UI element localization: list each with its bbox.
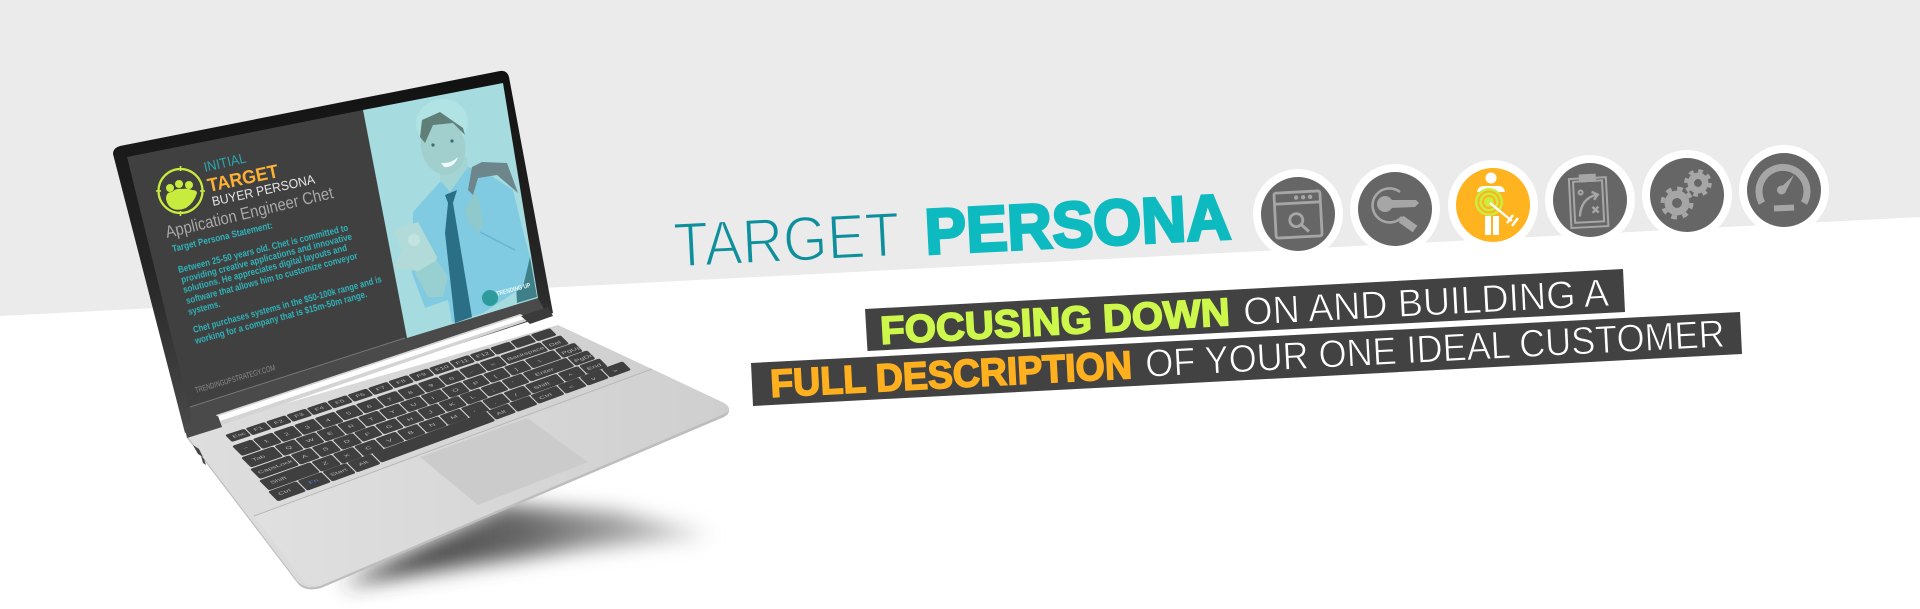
- key row: bottom row: [268, 361, 633, 502]
- key row: home row: H: [406, 417, 415, 422]
- trending up logo: TRENDING UP: [496, 282, 532, 298]
- key row: home row: ;: [490, 388, 496, 393]
- key row: numbers: 0: [448, 376, 456, 381]
- title: [672, 181, 1232, 281]
- key row: numbers: 6: [366, 404, 374, 409]
- blueprints: [393, 222, 437, 277]
- key row: home row: Enter: [534, 367, 556, 377]
- gray slanted background: [0, 0, 1920, 316]
- icon: speedometer: [1739, 145, 1829, 235]
- photo panel: [363, 83, 538, 338]
- raised hand: [465, 193, 483, 233]
- screen persona statement: systems.: [187, 299, 222, 318]
- key row: home row: K: [448, 402, 457, 407]
- subtitle line 1: [865, 269, 1625, 353]
- key row: shift row: ^: [568, 373, 576, 378]
- key row: QWERTY: I: [430, 396, 436, 401]
- key row: QWERTY: U: [409, 402, 419, 408]
- subtitle line 1: FOCUSING DOWN: [879, 291, 1231, 353]
- side ports: [193, 445, 206, 465]
- key row: shift row: End: [586, 363, 603, 371]
- man shirt: [412, 167, 530, 323]
- man neck: [440, 157, 468, 192]
- key row: QWERTY: Q: [284, 445, 294, 451]
- key row: shift row: ,: [471, 408, 477, 413]
- key row: home row: CapsLock: [257, 459, 295, 475]
- man shoulder jacket: [468, 162, 518, 195]
- key row: home row: PgDn: [573, 353, 596, 363]
- key row: numbers: 9: [427, 383, 436, 388]
- key row: function keys: F5: [334, 399, 347, 405]
- key row: numbers: 4: [324, 418, 333, 423]
- subtitle line 1: ON AND BUILDING A: [1242, 272, 1610, 334]
- key row: bottom row: v: [590, 376, 598, 381]
- key row: QWERTY: Tab: [251, 454, 267, 462]
- man face: [420, 123, 466, 174]
- icon: target persona figure: [1448, 160, 1538, 250]
- key row: bottom row: Start: [329, 468, 349, 477]
- key row: home row: A: [301, 454, 310, 459]
- key row: QWERTY: P: [472, 381, 481, 386]
- screen persona statement: solutions. He appreciates digital layouts and: [182, 243, 348, 296]
- key row: numbers: 2: [283, 432, 291, 437]
- right hinge: [521, 307, 553, 324]
- screen heading: Application Engineer Chet: [163, 183, 335, 242]
- key row: bottom row: Fn: [308, 478, 320, 485]
- key row: QWERTY: [241, 342, 586, 468]
- screen heading: [163, 150, 335, 242]
- screen bottom line: [190, 338, 405, 407]
- laptop illustration: [113, 71, 729, 589]
- key row: function keys: F3: [293, 412, 306, 419]
- icon: gears: [1642, 150, 1732, 240]
- key row: shift row: N: [428, 422, 437, 428]
- laptop lid: [113, 71, 553, 438]
- screen persona statement: [171, 220, 383, 347]
- screen persona statement: providing creative applications and innovative: [180, 231, 353, 286]
- screen persona statement: Chet purchases systems in the $50-100k range and is: [192, 274, 383, 336]
- key row: function keys: Esc: [231, 431, 248, 439]
- key row: bottom row: Ctrl: [277, 488, 293, 496]
- key row: numbers: 7: [386, 397, 394, 402]
- screen heading: TARGET: [206, 161, 281, 197]
- key row: QWERTY: R: [347, 424, 356, 429]
- subtitle: [751, 269, 1742, 406]
- key row: home row: G: [385, 424, 394, 430]
- key row: function keys: F2: [273, 419, 286, 426]
- key row: shift row: /: [513, 393, 519, 397]
- subtitle line 2: [751, 312, 1742, 406]
- key row: numbers: 8: [407, 390, 415, 395]
- key row: numbers: 5: [345, 411, 353, 416]
- key row: bottom row: Ctrl: [538, 392, 554, 401]
- screen persona statement: Between 25-50 years old. Chet is committed to: [177, 223, 350, 276]
- icon: keyword search: [1350, 164, 1440, 254]
- subtitle line 2: OF YOUR ONE IDEAL CUSTOMER: [1144, 313, 1726, 386]
- icon: browser search: [1253, 169, 1343, 259]
- key row: numbers: 3: [304, 425, 312, 430]
- key row: home row: D: [343, 439, 352, 445]
- screen persona statement: Target Persona Statement:: [171, 220, 274, 255]
- palm rest divider: [254, 369, 652, 516]
- key row: QWERTY: \: [537, 359, 543, 364]
- lower hand: [415, 260, 448, 297]
- screen footer url: TRENDINGUPSTRATEGY.COM: [194, 363, 276, 395]
- key row: QWERTY: O: [451, 388, 461, 393]
- key row: shift row: M: [449, 414, 460, 420]
- key row: shift row: V: [385, 438, 395, 443]
- key row: function keys: F10: [434, 364, 451, 372]
- title: TARGET: [672, 200, 901, 281]
- man back jacket: [515, 257, 537, 303]
- hard hat: [416, 99, 468, 136]
- trending up logo: [482, 282, 532, 306]
- hinge silver strip: [216, 314, 533, 425]
- screen persona statement: software that allows him to customize conveyor: [185, 251, 359, 307]
- subtitle line 2: FULL DESCRIPTION: [769, 344, 1133, 406]
- key row: function keys: F1: [253, 426, 265, 432]
- key row: numbers: ~: [242, 446, 250, 451]
- key row: home row: S: [322, 446, 331, 452]
- screen logo: target with people: [156, 166, 205, 216]
- key row: shift row: Shift: [269, 476, 288, 485]
- key row: numbers: Backspace: [506, 346, 547, 362]
- key row: shift row: C: [364, 445, 373, 451]
- key row: function keys: F8: [395, 379, 408, 385]
- key row: function keys: F12: [475, 351, 492, 359]
- screen persona statement: working for a company that is $15m-50m range.: [193, 289, 368, 347]
- key row: bottom row: <: [568, 385, 576, 390]
- laptop shadow: [340, 505, 715, 586]
- key row: QWERTY: Y: [389, 409, 398, 415]
- key row: numbers: 1: [263, 439, 271, 444]
- lid bezel: [113, 71, 553, 433]
- key row: QWERTY: E: [326, 431, 335, 436]
- key row: function keys: F4: [314, 405, 326, 412]
- key row: home row: L: [469, 395, 477, 400]
- key row: QWERTY: ]: [514, 367, 520, 372]
- key row: function keys: F11: [455, 358, 471, 366]
- key row: QWERTY: W: [305, 437, 317, 444]
- key row: home row: F: [364, 432, 372, 437]
- key row: bottom row: Alt: [495, 409, 508, 416]
- title: PERSONA: [923, 181, 1232, 268]
- key row: shift row: [259, 358, 609, 490]
- key row: function keys: F9: [415, 372, 428, 379]
- key row: numbers: -: [469, 370, 475, 374]
- key row: QWERTY: [: [493, 375, 499, 379]
- key row: function keys: F6: [354, 392, 367, 399]
- key row: bottom row: >: [612, 368, 620, 374]
- screen heading: INITIAL: [202, 150, 248, 175]
- trackpad: [420, 418, 588, 505]
- key row: function keys: F7: [375, 385, 388, 392]
- keyboard: [225, 328, 633, 502]
- key row: bottom row: Alt: [357, 460, 370, 467]
- key row: function keys: [225, 328, 557, 442]
- key row: home row: [250, 350, 599, 479]
- key row: home row: J: [427, 410, 434, 415]
- key row: numbers: Del: [548, 340, 563, 348]
- hair: [420, 112, 465, 143]
- key row: shift row: Shift: [532, 381, 552, 391]
- key row: shift row: .: [492, 401, 498, 405]
- key row: shift row: X: [343, 453, 352, 459]
- key row: shift row: B: [407, 430, 416, 436]
- key row: numbers: =: [489, 362, 497, 367]
- laptop base: [187, 325, 729, 589]
- screen heading: BUYER PERSONA: [210, 171, 316, 209]
- screen dark panel: [127, 110, 407, 407]
- key row: QWERTY: PgUp: [560, 345, 583, 356]
- key row: shift row: Z: [321, 461, 330, 466]
- key row: numbers: [232, 335, 571, 456]
- left hinge: [184, 416, 222, 438]
- key row: home row: ': [511, 381, 516, 385]
- key row: QWERTY: T: [368, 417, 376, 422]
- man tie: [445, 190, 472, 323]
- icon: strategy clipboard: [1545, 155, 1635, 245]
